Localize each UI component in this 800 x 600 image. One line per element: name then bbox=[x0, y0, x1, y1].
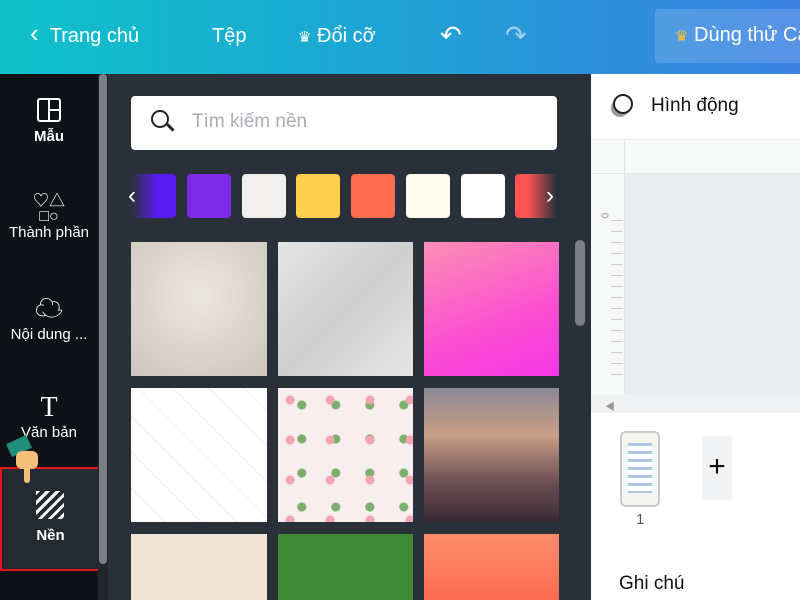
nav: file: Tệp bbox=[212, 25, 246, 47]
item: uploads: Nội dung ... bbox=[11, 326, 87, 343]
icon: pointing hand bbox=[6, 435, 38, 483]
item: elements: □○ bbox=[39, 208, 59, 225]
color swatches bbox=[128, 174, 556, 218]
item: background (selected) bbox=[0, 467, 101, 571]
search box: Tìm kiếm nền bbox=[192, 111, 307, 132]
top bar bbox=[0, 0, 800, 74]
nav: resize: ♛ Đổi cỡ bbox=[298, 25, 376, 47]
icon: undo: ↶ bbox=[440, 20, 462, 50]
nav: back home: ‹ Trang chủ bbox=[30, 18, 139, 48]
item: text bbox=[21, 392, 77, 441]
horizontal scrollbar: ◀ bbox=[605, 402, 615, 413]
page thumbnail bbox=[620, 431, 660, 507]
thumbnail grid bbox=[131, 242, 559, 600]
item: elements: ♡△ bbox=[33, 193, 65, 210]
item: elements: Thành phần bbox=[9, 224, 89, 241]
page number: 1 bbox=[636, 511, 644, 528]
item: uploads: ☁ bbox=[35, 293, 63, 324]
panel: backgrounds bbox=[108, 74, 591, 600]
left sidebar bbox=[0, 74, 98, 600]
panel scrollbar bbox=[575, 240, 585, 326]
canvas area bbox=[625, 174, 800, 395]
horizontal scrollbar bbox=[591, 395, 800, 413]
icon: stripes bbox=[36, 491, 64, 519]
panel collapse tab bbox=[586, 288, 606, 388]
item: text: Văn bản bbox=[21, 424, 77, 441]
header: animation: Hình động bbox=[651, 95, 739, 116]
icon: redo: ↷ bbox=[505, 20, 527, 50]
ruler: 0 bbox=[598, 213, 609, 218]
notes heading: Ghi chú bbox=[619, 573, 684, 594]
button: try pro bbox=[655, 9, 800, 63]
sidebar scrollbar bbox=[98, 74, 108, 600]
item: elements bbox=[9, 192, 89, 241]
item: uploads bbox=[11, 293, 87, 343]
item: templates: Mẫu bbox=[34, 128, 64, 145]
search box bbox=[131, 96, 557, 150]
panel collapse tab: ‹ bbox=[593, 326, 599, 346]
color swatches: › bbox=[546, 182, 554, 209]
item: background (selected): Nền bbox=[36, 527, 65, 544]
add page button bbox=[702, 436, 732, 500]
add page button: + bbox=[708, 450, 726, 483]
ruler bbox=[591, 140, 800, 395]
item: text: T bbox=[40, 392, 58, 423]
color swatches: ‹ bbox=[128, 182, 136, 209]
header: animation bbox=[591, 74, 800, 140]
